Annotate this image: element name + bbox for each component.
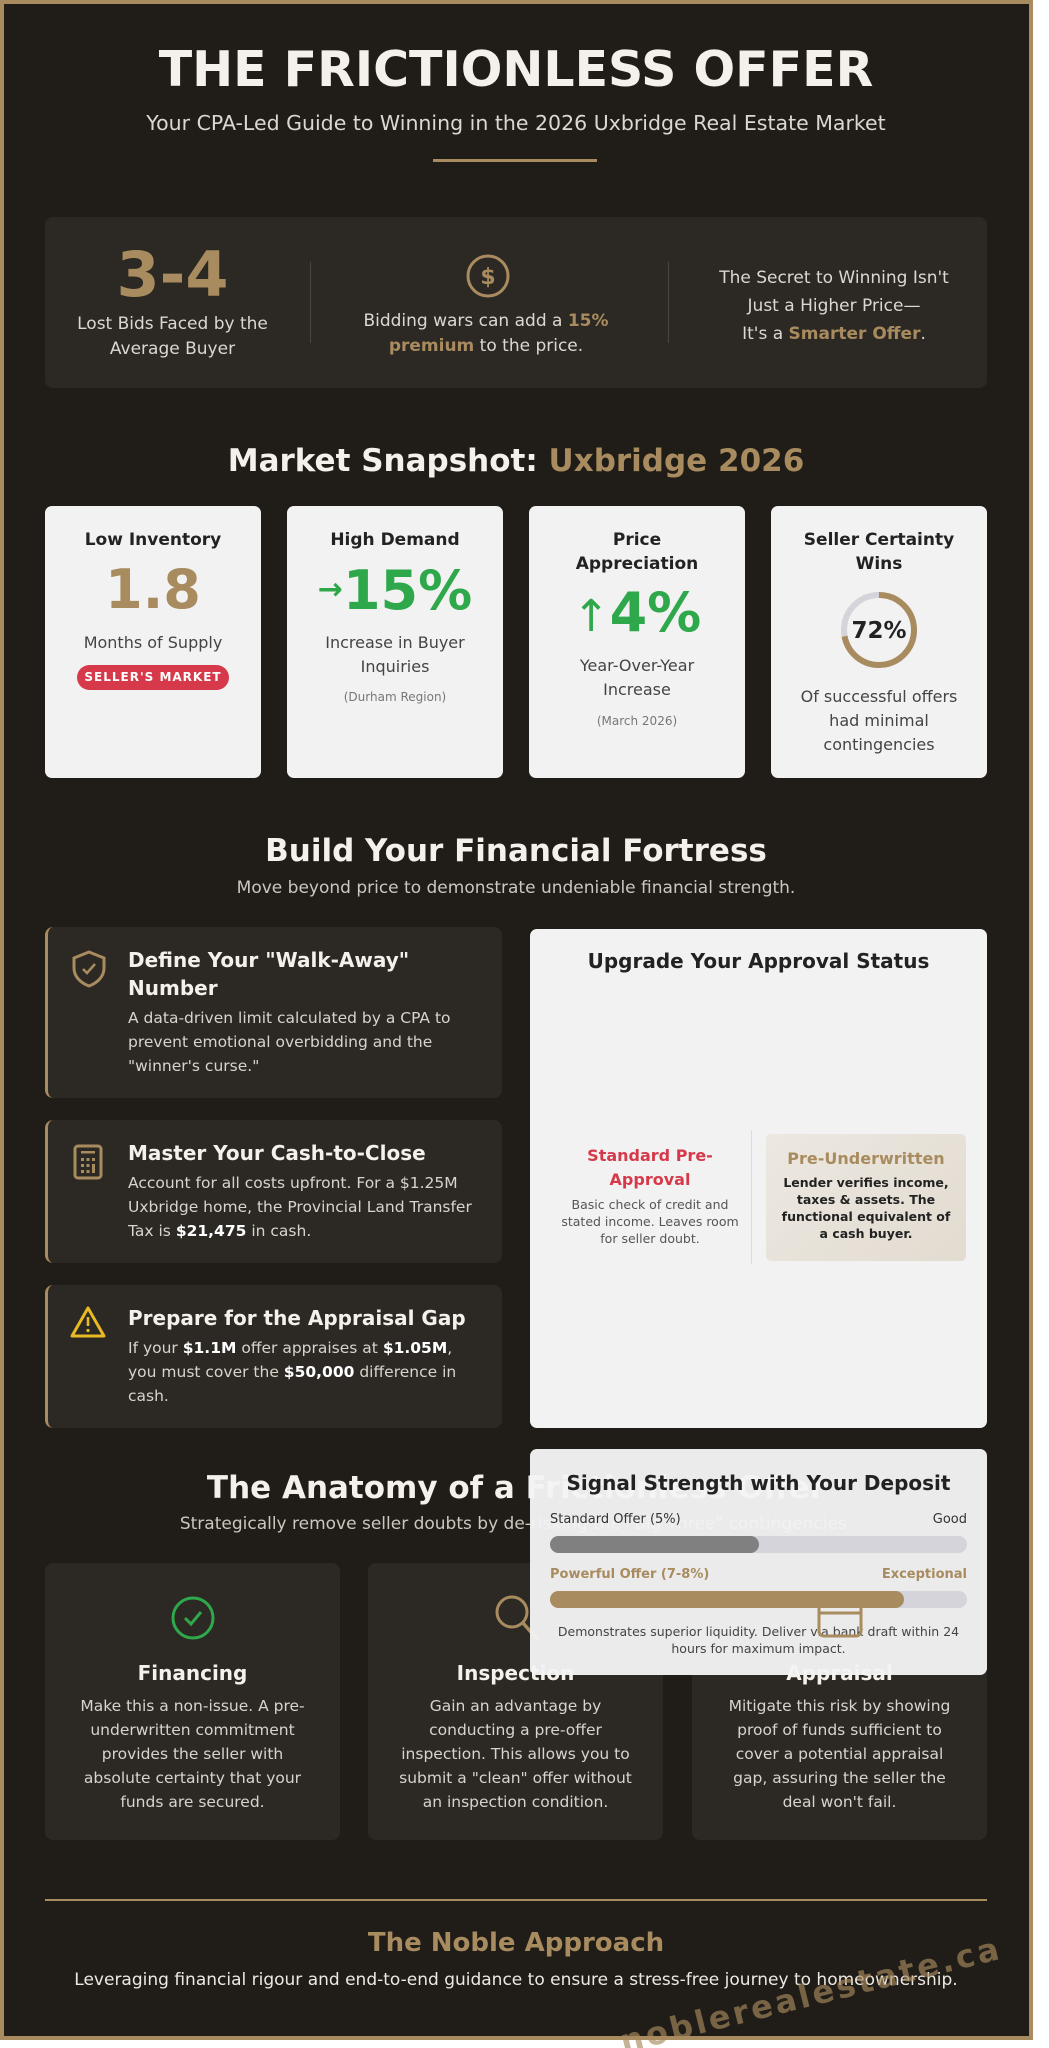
stat strip xyxy=(45,217,987,388)
card: price appreciation: Year-Over-Year xyxy=(580,656,694,675)
card: inspection: Inspection xyxy=(457,1661,574,1685)
card: seller certainty: Of successful offers xyxy=(801,687,957,706)
card: seller certainty: had minimal xyxy=(829,711,929,730)
stat: lost bids xyxy=(77,238,268,359)
subheading: Move beyond price to demonstrate undeniable financial strength. xyxy=(237,878,795,898)
subheading: anatomy: Strategically remove seller doubts by de-risking the "Big Three" contingencies. xyxy=(180,1514,852,1534)
card: low inventory: Low Inventory xyxy=(85,530,221,550)
bar: standard offer xyxy=(550,1512,967,1553)
panel: deposit signal strength: Signal Strength with Your Deposit xyxy=(567,1471,950,1495)
donut chart 72%: 72% xyxy=(851,618,907,644)
heading: market snapshot: Market Snapshot: Uxbridge 2026 xyxy=(228,443,804,479)
card: high demand: Inquiries xyxy=(361,657,429,676)
card: inspection xyxy=(368,1563,663,1840)
badge: seller's market xyxy=(77,665,229,690)
card: price appreciation: ↑4% xyxy=(573,581,701,644)
pre-underwritten box: Pre-Underwritten xyxy=(787,1149,945,1168)
icon: dollar xyxy=(466,254,510,298)
stat strip: Average Buyer xyxy=(110,339,235,359)
card: price appreciation: Increase xyxy=(603,680,671,699)
donut chart 72% xyxy=(841,592,917,668)
stat: smarter offer xyxy=(719,268,949,344)
card: price appreciation xyxy=(529,506,745,778)
card: appraisal: Mitigate this risk by showing proof of funds sufficient to cover a potential appraisal gap, assuring the seller the deal won't fail. xyxy=(729,1697,950,1811)
stat strip: 3-4 xyxy=(116,238,228,311)
card: high demand xyxy=(287,506,503,778)
card: high demand: →15% xyxy=(318,559,472,622)
card: financing: Financing xyxy=(138,1661,247,1685)
card: seller certainty: Wins xyxy=(856,554,902,574)
card: low inventory: 1.8 xyxy=(105,558,201,621)
tip: cash to close xyxy=(45,1120,502,1263)
panel: deposit signal strength xyxy=(530,1449,987,1675)
bar: powerful offer: Powerful Offer (7-8%) xyxy=(550,1567,709,1582)
stat: bidding premium xyxy=(363,254,609,356)
stat strip: Bidding wars can add a 15% xyxy=(363,311,609,331)
subtitle: Your CPA-Led Guide to Winning in the 2026 Uxbridge Real Estate Market xyxy=(146,111,886,135)
tip: cash to close: Account for all costs upfront. For a $1.25M Uxbridge home, the Provincial Land Transfer Tax is $21,475 in cash. xyxy=(128,1174,472,1240)
heading: anatomy: The Anatomy of a Frictionless Offer xyxy=(207,1470,825,1506)
card: appraisal xyxy=(692,1563,987,1840)
standard pre-approval: Approval xyxy=(610,1170,690,1189)
tip: walk-away number xyxy=(45,927,502,1098)
tip: appraisal gap: If your $1.1M offer appraises at $1.05M, you must cover the $50,000 difference in cash. xyxy=(128,1339,456,1405)
card: seller certainty xyxy=(771,506,987,778)
icon: check circle xyxy=(172,1596,214,1640)
icon: calculator xyxy=(74,1144,102,1180)
card: low inventory xyxy=(45,506,261,778)
pre-underwritten box xyxy=(766,1134,966,1261)
tip: cash to close: Master Your Cash-to-Close xyxy=(128,1141,426,1165)
stat: smarter offer: Just a Higher Price— xyxy=(748,296,920,316)
stat strip: Lost Bids Faced by the xyxy=(77,314,268,334)
card: seller certainty: contingencies xyxy=(823,735,935,754)
heading: financial fortress: Build Your Financial Fortress xyxy=(265,833,767,869)
card: price appreciation: Appreciation xyxy=(576,554,698,574)
tip: appraisal gap xyxy=(45,1285,502,1428)
panel: upgrade approval status: Upgrade Your Approval Status xyxy=(588,949,929,973)
bar: standard offer: Standard Offer (5%) xyxy=(550,1512,681,1527)
bar: powerful offer xyxy=(550,1567,967,1608)
card: financing: Make this a non-issue. A pre-underwritten commitment provides the seller with absolute certainty that your funds are secured. xyxy=(80,1697,305,1811)
card: price appreciation: (March 2026) xyxy=(597,714,677,728)
caption: Demonstrates superior liquidity. Deliver via bank draft within 24 hours for maximum impact. xyxy=(558,1624,959,1656)
card: financing xyxy=(45,1563,340,1840)
card: low inventory: Months of Supply xyxy=(84,633,222,652)
tip: appraisal gap: Prepare for the Appraisal Gap xyxy=(128,1306,466,1330)
icon: dollar: $ xyxy=(480,265,496,290)
stat: smarter offer: The Secret to Winning Isn't xyxy=(719,268,949,288)
panel: upgrade approval status xyxy=(530,929,987,1428)
card: appraisal: Appraisal xyxy=(786,1661,893,1685)
standard pre-approval: Basic check of credit and stated income. Leaves room for seller doubt. xyxy=(561,1197,739,1246)
footer heading: The Noble Approach xyxy=(368,1928,664,1958)
tip: walk-away number: A data-driven limit calculated by a CPA to prevent emotional overbidding and the "winner's curse." xyxy=(128,1009,451,1075)
standard pre-approval xyxy=(561,1146,739,1246)
footer text: Leveraging financial rigour and end-to-end guidance to ensure a stress-free journey to homeownership. xyxy=(74,1970,958,1990)
tip: walk-away number: Define Your "Walk-Away" Number xyxy=(128,948,409,1000)
card: high demand: Increase in Buyer xyxy=(325,633,465,652)
card: inspection: Gain an advantage by conducting a pre-offer inspection. This allows you to submit a "clean" offer without an inspection condition. xyxy=(399,1697,632,1811)
icon: card (appraisal) xyxy=(818,1608,862,1638)
stat: smarter offer: It's a Smarter Offer. xyxy=(742,324,926,344)
bar: standard offer: Good xyxy=(933,1512,967,1527)
badge: seller's market: SELLER'S MARKET xyxy=(84,670,222,684)
card: price appreciation: Price xyxy=(613,530,661,550)
pre-underwritten box: Lender verifies income, taxes & assets. The functional equivalent of a cash buyer. xyxy=(782,1175,950,1241)
standard pre-approval: Standard Pre- xyxy=(587,1146,713,1165)
card: seller certainty: Seller Certainty xyxy=(804,530,954,550)
icon: magnifier xyxy=(496,1596,530,1634)
icon: warning xyxy=(70,1306,106,1338)
bar: powerful offer: Exceptional xyxy=(882,1567,967,1582)
stat strip: premium to the price. xyxy=(389,336,583,356)
card: high demand: (Durham Region) xyxy=(344,690,446,704)
icon: shield xyxy=(72,950,106,988)
title: THE FRICTIONLESS OFFER xyxy=(159,41,873,98)
card: high demand: High Demand xyxy=(330,530,460,550)
